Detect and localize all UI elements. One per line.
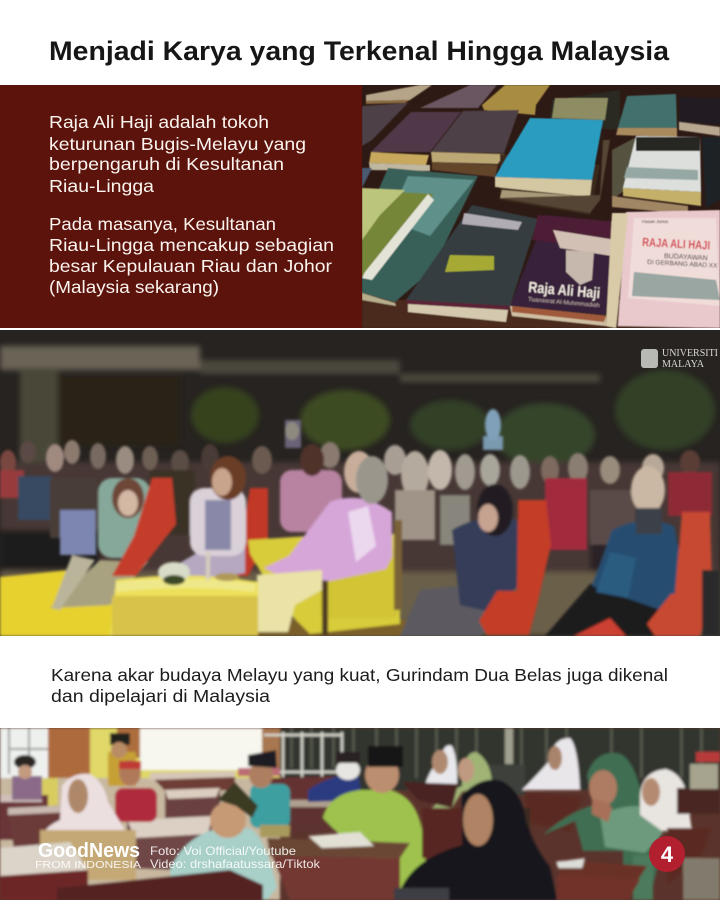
page number badge: [649, 836, 685, 872]
panel: Raja Ali Haji description: [0, 85, 362, 328]
front desk with page: [557, 860, 647, 880]
right desks: [677, 788, 720, 814]
page number badge: 4: [661, 842, 674, 867]
left desks: [0, 795, 48, 840]
text block: Gurindam Dua Belas in Malaysia: dan dipelajari di Malaysia: [51, 686, 270, 706]
photo: books on a table: Raja Ali Haji: [528, 279, 601, 302]
photo: books on a table: [362, 85, 720, 328]
footer: GoodNews From Indonesia logo: FROM INDONESIA: [35, 859, 141, 871]
girl white hijab: [44, 772, 126, 832]
black hijab girl: [397, 780, 557, 900]
red shirt child: [115, 788, 157, 822]
text block: first paragraph: Raja Ali Haji adalah tokoh: [49, 112, 269, 132]
photo: audience at Universiti Malaya: [0, 330, 720, 636]
footer: photo and video credits: Foto: Voi Official/Youtube: [150, 844, 296, 858]
back left child: [12, 776, 42, 800]
foreground desks left: [0, 842, 88, 878]
footer: GoodNews From Indonesia logo: GoodNews: [38, 840, 140, 862]
text block: second paragraph: (Malaysia sekarang): [49, 277, 219, 297]
logo: Universiti Malaya: MALAYA: [662, 358, 704, 370]
desk in front of green boy: [267, 838, 410, 858]
right white hijab girl: [640, 769, 692, 831]
teal shirt boy: [250, 784, 290, 828]
text block: first paragraph: Riau-Lingga: [49, 176, 154, 196]
teacher green hijab: [543, 753, 663, 891]
text block: Gurindam Dua Belas in Malaysia: [51, 665, 668, 706]
text block: second paragraph: [49, 214, 334, 297]
back wall left: [88, 728, 282, 780]
yellow shirt boy: [108, 752, 136, 786]
boy with mask: [308, 772, 362, 802]
photo: books on a table: BUDAYAWAN: [664, 253, 708, 262]
footer: GoodNews From Indonesia logo: [35, 840, 141, 871]
title: Menjadi Karya yang Terkenal Hingga Malaysia: [49, 36, 670, 66]
green shirt boy: [323, 790, 430, 900]
logo: Universiti Malaya: [641, 349, 718, 368]
corrugated dark wall: [280, 728, 720, 790]
crowd heads: [0, 440, 700, 499]
text block: Gurindam Dua Belas in Malaysia: Karena akar budaya Melayu yang kuat, Gurindam Dua Belas juga dikenal: [51, 665, 668, 685]
text block: first paragraph: keturunan Bugis-Melayu yang: [49, 134, 306, 154]
text block: second paragraph: Riau-Lingga mencakup sebagian: [49, 235, 334, 255]
text block: first paragraph: [49, 112, 306, 196]
back girls and desks right: [424, 745, 457, 788]
footer: photo and video credits: [150, 844, 321, 871]
photo: books on a table: DI GERBANG ABAD XX: [647, 259, 718, 270]
photo: books on a table: Hasan Junus: [642, 219, 669, 224]
photo: pupils in a classroom: [0, 728, 720, 900]
text block: first paragraph: berpengaruh di Kesultanan: [49, 154, 284, 174]
footer: photo and video credits: Video: drshafaatussara/Tiktok: [150, 857, 321, 871]
metal rack: [264, 732, 342, 777]
text block: second paragraph: besar Kepulauan Riau dan Johor: [49, 256, 332, 276]
mint shirt boy: [170, 828, 277, 900]
book stack: [690, 764, 718, 789]
text block: second paragraph: Pada masanya, Kesultanan: [49, 214, 276, 234]
photo: books on a table: Tuanasrat Al-Muhmmadiah: [528, 297, 600, 309]
